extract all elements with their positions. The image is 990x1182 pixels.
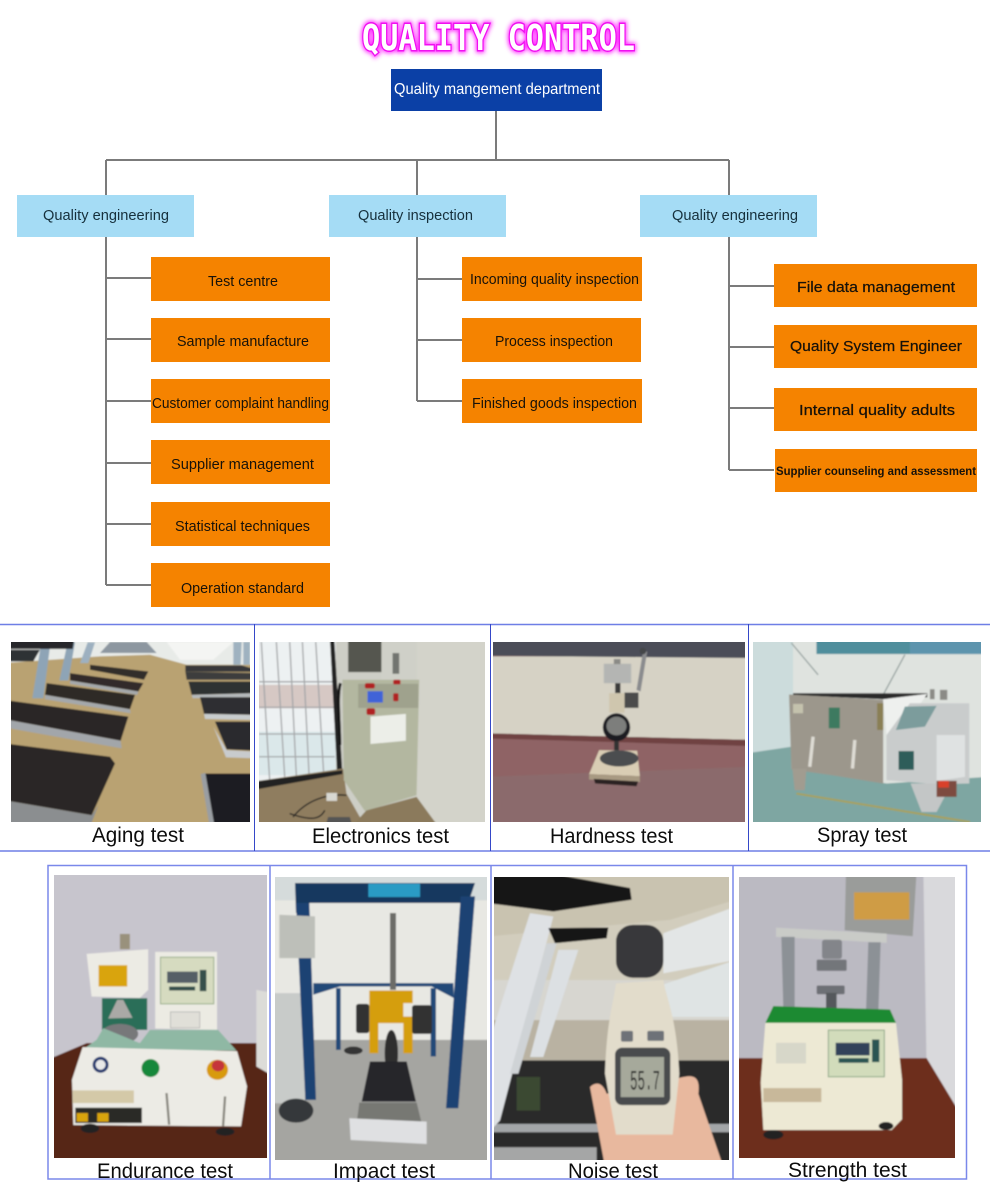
photo: impact test frame (275, 877, 487, 1160)
middle column tasks (462, 257, 642, 423)
right column tasks: Internal quality adults (799, 402, 955, 419)
photo row 1 captions (92, 824, 907, 848)
photo: hardness test gauge (493, 642, 745, 822)
photo: spray test chamber (753, 642, 981, 822)
photo row 1 captions: Electronics test (312, 825, 449, 848)
left column tasks: Operation standard (181, 580, 304, 597)
left branch: Quality engineering (17, 195, 194, 237)
photo: electronics test cabinet (259, 642, 485, 822)
title: QUALITY CONTROL (362, 16, 635, 59)
photo: endurance test machine (54, 875, 267, 1158)
left column tasks (151, 257, 330, 607)
middle column tasks: Finished goods inspection (472, 395, 637, 412)
left column tasks: Customer complaint handling (152, 395, 329, 412)
right column tasks (774, 264, 977, 492)
left column tasks: Test centre (208, 273, 278, 290)
left column tasks: Sample manufacture (177, 333, 309, 350)
right column tasks: Supplier counseling and assessment (776, 464, 976, 478)
photo row 1 captions: Aging test (92, 824, 184, 847)
middle column tasks: Incoming quality inspection (470, 271, 639, 288)
photo row 2 captions (97, 1159, 907, 1182)
photo row 2 captions: Strength test (788, 1159, 907, 1182)
department box: Quality mangement department (391, 69, 602, 111)
photo: noise test sound meter: 55.7 (630, 1068, 660, 1099)
photo row 1 captions: Spray test (817, 824, 907, 847)
photo: aging test treadmills (11, 642, 250, 822)
middle branch: Quality inspection (329, 195, 506, 237)
right column tasks: Quality System Engineer (790, 338, 962, 355)
left column tasks: Supplier management (171, 456, 315, 473)
middle column tasks: Process inspection (495, 333, 613, 350)
right branch: Quality engineering (640, 195, 817, 237)
photo row 2 frame lines (48, 865, 966, 1179)
photo: strength test press (739, 877, 955, 1158)
middle branch: Quality inspection: Quality inspection (358, 207, 473, 224)
photo row 1 captions: Hardness test (550, 825, 673, 848)
org chart connectors (106, 111, 774, 585)
photo: noise test sound meter (494, 877, 729, 1160)
left branch: Quality engineering: Quality engineering (43, 207, 169, 224)
right branch: Quality engineering: Quality engineering (672, 207, 798, 224)
right column tasks: File data management (797, 279, 956, 296)
department box: Quality mangement department: Quality mangement department (394, 81, 601, 98)
photo row 1 frame lines (0, 624, 990, 851)
left column tasks: Statistical techniques (175, 518, 310, 535)
title: QUALITY CONTROL (362, 16, 635, 59)
